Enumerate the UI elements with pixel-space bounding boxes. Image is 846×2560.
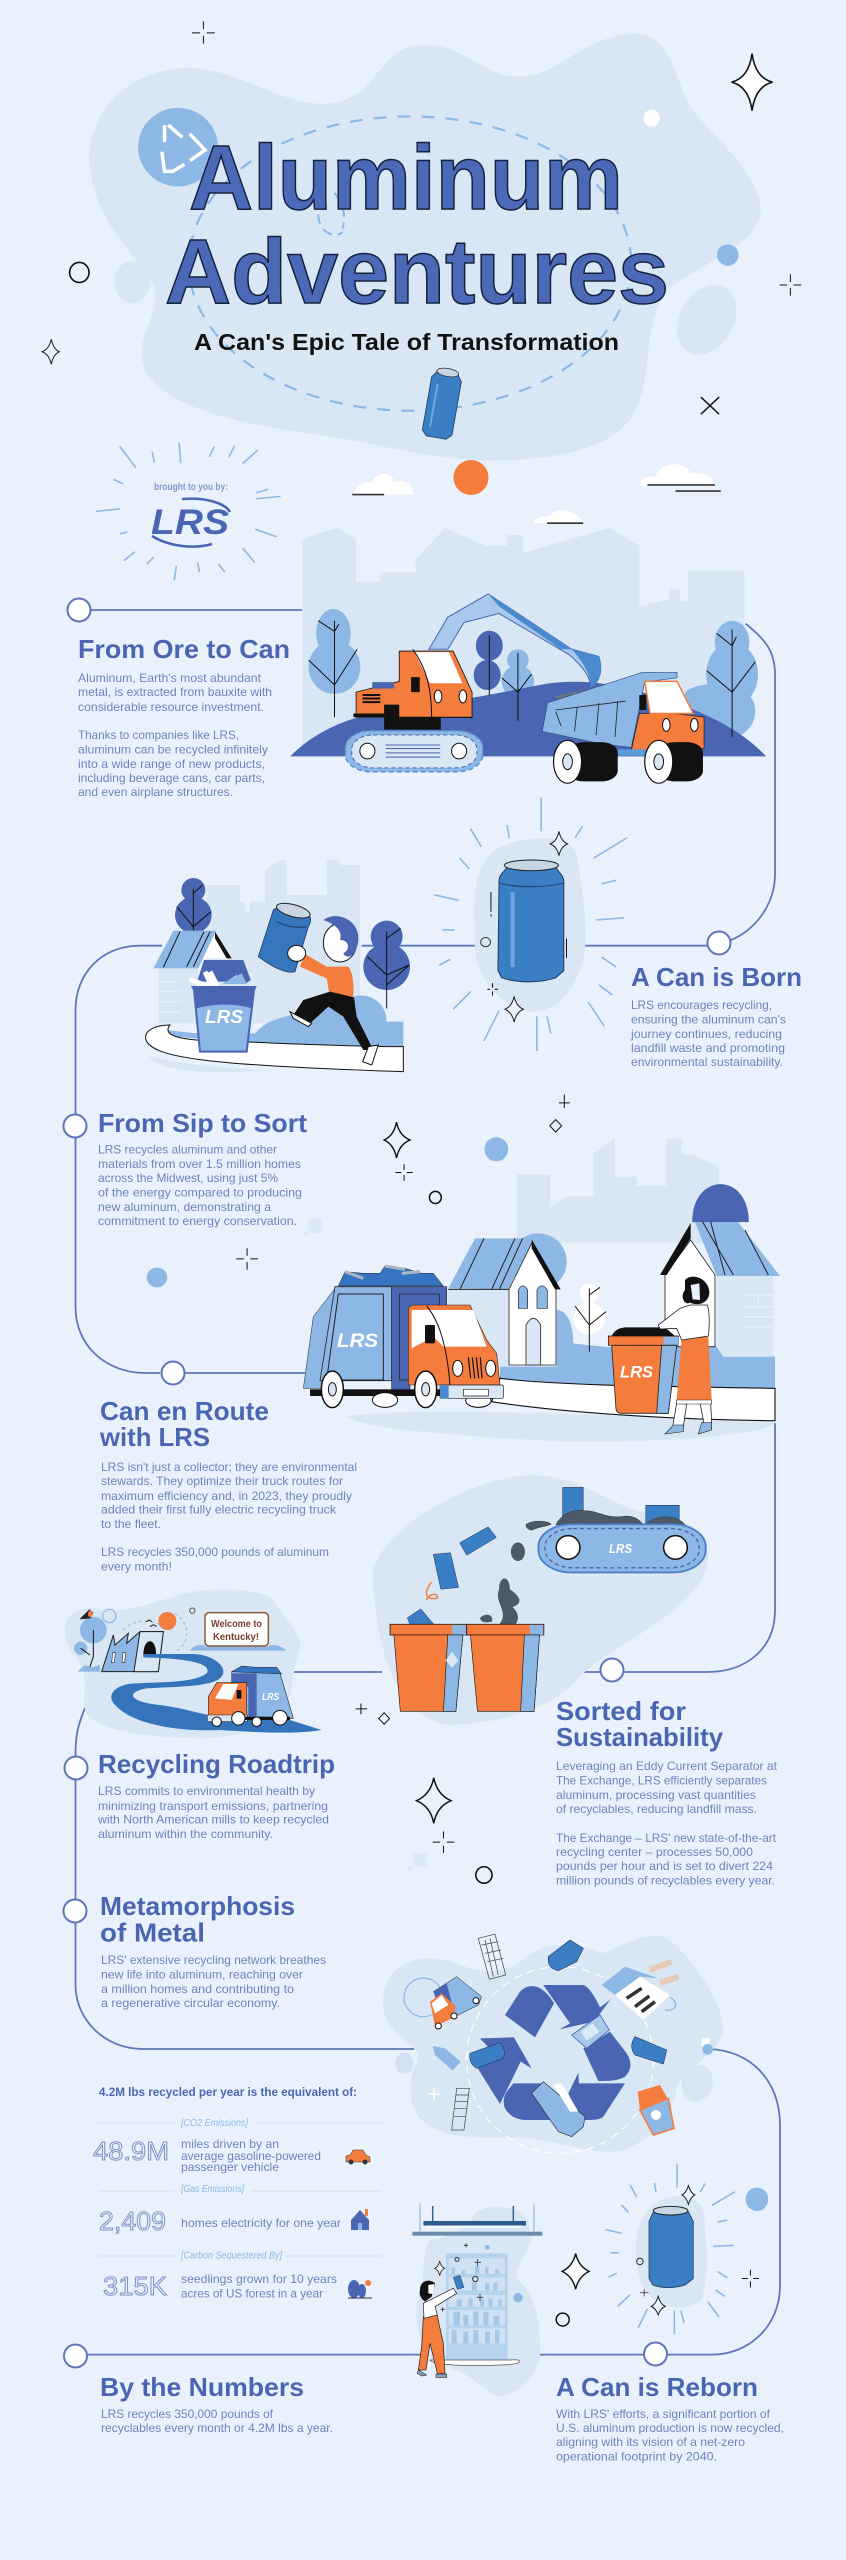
- text block: recycling roadtrip: minimizing transport emissions, partnering: [98, 1799, 328, 1813]
- logo on bin: LRS: [205, 1007, 243, 1027]
- decorative marks beside sip to sort: [147, 1095, 570, 1287]
- illustration: reborn can: [556, 2164, 768, 2334]
- text block: recycling roadtrip: [97, 1784, 329, 1841]
- text block: by the numbers: recyclables every month or 4.2M lbs a year.: [101, 2421, 333, 2435]
- text block: by the numbers: LRS recycles 350,000 pounds of: [101, 2407, 274, 2421]
- text block: a can is reborn: [556, 2407, 784, 2464]
- text block: from sip to sort: materials from over 1.5 million homes: [98, 1157, 301, 1171]
- text block: can en route: [101, 1460, 357, 1574]
- heading: metamorphosis of metal: [100, 1891, 295, 1948]
- timeline path: [76, 610, 780, 2355]
- text block: a can is reborn: With LRS' efforts, a significant portion of: [556, 2407, 771, 2421]
- stat: carbon sequestered: [Carbon Sequestered By]: [180, 2250, 282, 2262]
- logo: LRS brought to you by: brought to you by:: [154, 482, 228, 493]
- stat: co2 emissions: miles driven by an: [181, 2137, 279, 2151]
- text block: a can is reborn: operational footprint by 2040.: [556, 2450, 717, 2464]
- text block: from ore to can: [78, 671, 272, 799]
- text block: sorted for sustainability: recycling center – processes 50,000: [556, 1845, 753, 1859]
- sun: [454, 460, 488, 495]
- text block: can en route: LRS recycles 350,000 pounds of aluminum: [101, 1545, 329, 1559]
- heading: recycling roadtrip: Recycling Roadtrip: [98, 1749, 335, 1779]
- stat: co2 emissions: [CO2 Emissions]: [180, 2118, 248, 2129]
- illustration: recycling roadtrip: [65, 1590, 322, 1738]
- timeline nodes: [64, 598, 730, 2368]
- sign: welcome to kentucky: Kentucky!: [213, 1632, 259, 1643]
- text block: sorted for sustainability: The Exchange – LRS' new state-of-the-art: [556, 1831, 777, 1845]
- decorative sparkles around title: [42, 21, 801, 414]
- stat: gas emissions: [99, 2184, 341, 2236]
- text block: metamorphosis of metal: new life into aluminum, reaching over: [101, 1968, 303, 1982]
- heading: metamorphosis of metal: Metamorphosis: [100, 1891, 295, 1921]
- text block: from sip to sort: of the energy compared to producing: [98, 1185, 302, 1199]
- text block: a can is reborn: aligning with its vision of a net-zero: [556, 2435, 745, 2449]
- stats heading: 4.2M lbs recycled per year is the equivalent of:: [99, 2085, 357, 2099]
- title: Adventures: [165, 221, 669, 323]
- text block: a can is born: ensuring the aluminum can's: [631, 1012, 786, 1026]
- heading: from sip to sort: From Sip to Sort: [98, 1108, 307, 1138]
- text block: from ore to can: including beverage cans, car parts,: [78, 771, 265, 785]
- sign: welcome to kentucky: [211, 1619, 262, 1643]
- text block: metamorphosis of metal: a regenerative circular economy.: [101, 1996, 280, 2010]
- text block: sorted for sustainability: The Exchange, LRS efficiently separates: [556, 1774, 767, 1788]
- text block: a can is born: landfill waste and promoting: [631, 1041, 785, 1055]
- stat: co2 emissions: [93, 2118, 321, 2174]
- text block: can en route: added their first fully electric recycling truck: [101, 1503, 337, 1517]
- stat: carbon sequestered: acres of US forest in a year: [181, 2286, 323, 2300]
- text block: from sip to sort: across the Midwest, using just 5%: [98, 1171, 278, 1185]
- clouds: [352, 464, 721, 523]
- text block: sorted for sustainability: million pounds of recyclables every year.: [556, 1874, 775, 1888]
- logo on conveyor: LRS: [609, 1541, 632, 1556]
- text block: a can is born: [630, 998, 786, 1069]
- stat: co2 emissions: 48.9M: [93, 2136, 169, 2166]
- stat: gas emissions: 2,409: [99, 2206, 166, 2236]
- text block: can en route: to the fleet.: [101, 1517, 161, 1531]
- heading: can en route with lrs: Can en Route: [100, 1396, 269, 1426]
- text block: from ore to can: Thanks to companies like LRS,: [78, 728, 239, 742]
- illustration: truck, houses and woman with bin: [303, 1222, 780, 1442]
- heading: sorted for sustainability: Sustainability: [556, 1722, 724, 1752]
- stat: co2 emissions: average gasoline-powered: [181, 2149, 321, 2163]
- text block: sorted for sustainability: aluminum, processing vast quantities: [556, 1788, 756, 1802]
- heading: metamorphosis of metal: of Metal: [100, 1918, 205, 1948]
- illustration: glowing can: [434, 797, 627, 1051]
- sign: welcome to kentucky: Welcome to: [211, 1619, 262, 1630]
- illustration: excavator and dump truck: [290, 528, 766, 783]
- text block: a can is born: LRS encourages recycling,: [631, 998, 772, 1012]
- stats divider lines: [98, 2123, 382, 2256]
- illustration: sorting conveyor and bins: [372, 1475, 708, 1725]
- stat: carbon sequestered: [103, 2250, 337, 2301]
- panel: title backdrop: [89, 34, 761, 461]
- text block: sorted for sustainability: Leveraging an Eddy Current Separator at: [556, 1759, 778, 1773]
- text block: from sip to sort: new aluminum, demonstrating a: [98, 1200, 271, 1214]
- text block: metamorphosis of metal: [101, 1953, 326, 2010]
- text block: a can is born: journey continues, reducing: [630, 1027, 782, 1041]
- text block: recycling roadtrip: aluminum within the community.: [98, 1827, 273, 1841]
- text block: can en route: LRS isn't just a collector; they are environmental: [101, 1460, 357, 1474]
- text block: sorted for sustainability: pounds per hour and is set to divert 224: [556, 1859, 773, 1873]
- icon: recycling circle: [138, 108, 218, 186]
- logo: LRS brought to you by: LRS: [151, 503, 229, 542]
- text block: metamorphosis of metal: LRS' extensive recycling network breathes: [101, 1953, 326, 1967]
- text block: can en route: stewards. They optimize their truck routes for: [101, 1474, 343, 1488]
- icon: car: [346, 2150, 370, 2164]
- decorative marks mid page: [356, 1704, 492, 1883]
- text block: from ore to can: aluminum can be recycled infinitely: [78, 742, 268, 756]
- text block: recycling roadtrip: with North American mills to keep recycled: [97, 1812, 329, 1826]
- text block: can en route: every month!: [101, 1560, 172, 1574]
- heading: a can is born: A Can is Born: [631, 962, 802, 992]
- heading: a can is reborn: A Can is Reborn: [556, 2372, 758, 2402]
- icon: trees: [348, 2280, 372, 2298]
- text block: metamorphosis of metal: a million homes and contributing to: [101, 1982, 294, 1996]
- title: Aluminum: [189, 127, 623, 229]
- stat: co2 emissions: passenger vehicle: [181, 2160, 279, 2174]
- stat: carbon sequestered: 315K: [103, 2271, 168, 2301]
- text block: from sip to sort: LRS recycles aluminum and other: [98, 1143, 277, 1157]
- logo on small truck: LRS: [262, 1692, 279, 1703]
- heading: can en route with lrs: with LRS: [99, 1422, 210, 1452]
- heading: by the numbers: By the Numbers: [100, 2372, 304, 2402]
- text block: by the numbers: [101, 2407, 333, 2435]
- logos on truck and bin: [337, 1331, 654, 1382]
- text block: sorted for sustainability: of recyclables, reducing landfill mass.: [556, 1802, 757, 1816]
- text block: from sip to sort: [98, 1143, 302, 1228]
- text block: a can is reborn: U.S. aluminum production is now recycled,: [556, 2421, 784, 2435]
- text block: from ore to can: into a wide range of new products,: [78, 757, 265, 771]
- illustration: woman at recycled can display: [412, 2203, 542, 2397]
- stat: gas emissions: homes electricity for one year: [181, 2216, 341, 2230]
- illustration: recycling symbol with items: [383, 1934, 723, 2153]
- logos on truck and bin: LRS: [337, 1331, 378, 1352]
- text block: can en route: maximum efficiency and, in 2023, they proudly: [101, 1489, 352, 1503]
- heading: sorted for sustainability: [556, 1696, 724, 1752]
- text block: from sip to sort: commitment to energy conservation.: [98, 1214, 297, 1228]
- text block: a can is born: environmental sustainability.: [631, 1055, 783, 1069]
- icon: house: [351, 2209, 369, 2230]
- icon: tilted can: [421, 366, 463, 440]
- text block: from ore to can: considerable resource investment.: [78, 700, 264, 714]
- text block: from ore to can: and even airplane structures.: [78, 785, 233, 799]
- illustration: skyline and dome behind houses: [517, 1137, 749, 1243]
- logo: LRS brought to you by: [151, 482, 230, 547]
- stat: carbon sequestered: seedlings grown for 10 years: [181, 2272, 337, 2286]
- text block: from ore to can: Aluminum, Earth's most abundant: [78, 671, 262, 685]
- logos on truck and bin: LRS: [620, 1363, 654, 1382]
- heading: from ore to can: From Ore to Can: [78, 634, 290, 664]
- heading: sorted for sustainability: Sorted for: [556, 1696, 686, 1726]
- illustration: person tossing can into bin: [146, 860, 410, 1072]
- title: [165, 127, 669, 323]
- text block: sorted for sustainability: [556, 1759, 778, 1888]
- text block: recycling roadtrip: LRS commits to environmental health by: [98, 1784, 315, 1798]
- heading: can en route with lrs: [99, 1396, 269, 1452]
- subtitle: A Can's Epic Tale of Transformation: [194, 329, 619, 355]
- rays around logo: [96, 443, 281, 580]
- stat: gas emissions: [Gas Emissions]: [180, 2184, 244, 2195]
- text block: from ore to can: metal, is extracted from bauxite with: [78, 685, 272, 699]
